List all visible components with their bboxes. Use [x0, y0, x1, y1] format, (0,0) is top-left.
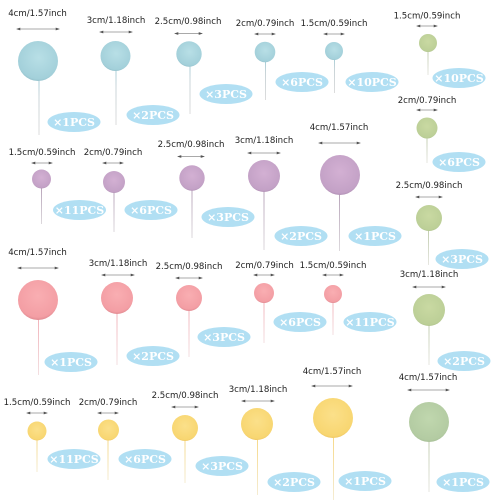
size arrow	[176, 277, 202, 279]
size label: 2.5cm/0.98inch	[155, 17, 221, 27]
quantity pill: ×1PCS	[344, 475, 386, 488]
topper: yellow 2.5cm	[152, 391, 248, 483]
ball	[320, 155, 360, 195]
topper: purple 3cm	[235, 136, 328, 250]
quantity pill: ×6PCS	[279, 316, 321, 329]
ball	[413, 294, 445, 326]
quantity pill: ×6PCS	[124, 453, 166, 466]
size label: 1.5cm/0.59inch	[300, 261, 366, 271]
quantity pill: ×3PCS	[441, 253, 483, 266]
size label: 1.5cm/0.59inch	[9, 148, 75, 158]
size label: 3cm/1.18inch	[400, 270, 458, 280]
topper: purple 4cm	[310, 123, 402, 251]
quantity pill: ×1PCS	[354, 230, 396, 243]
size label: 2.5cm/0.98inch	[158, 140, 224, 150]
size arrow	[319, 142, 360, 144]
quantity pill: ×10PCS	[347, 76, 397, 89]
size arrow	[102, 274, 134, 276]
size arrow	[255, 33, 275, 35]
size label: 2cm/0.79inch	[79, 398, 137, 408]
size arrow	[413, 286, 445, 288]
ball	[248, 160, 280, 192]
ball	[100, 41, 130, 71]
stick	[264, 302, 265, 343]
quantity pill: ×2PCS	[132, 109, 174, 122]
quantity pill: ×3PCS	[203, 331, 245, 344]
ball	[176, 285, 202, 311]
stick	[108, 440, 109, 480]
topper: yellow 3cm	[229, 385, 320, 495]
topper: green 3cm	[400, 270, 490, 371]
size arrow	[248, 152, 280, 154]
size label: 1.5cm/0.59inch	[301, 19, 367, 29]
size arrow	[324, 33, 344, 35]
stick	[334, 59, 335, 93]
ball	[325, 42, 343, 60]
topper: pink 3cm	[89, 259, 180, 366]
quantity pill: ×6PCS	[438, 156, 480, 169]
stick	[36, 440, 38, 472]
quantity pill: ×6PCS	[281, 76, 323, 89]
ball	[103, 171, 125, 193]
size arrow	[323, 274, 343, 276]
ball	[419, 34, 437, 52]
quantity pill: ×3PCS	[207, 211, 249, 224]
size arrow	[103, 162, 123, 164]
size label: 4cm/1.57inch	[399, 373, 457, 383]
stick	[41, 188, 42, 224]
topper: blue 1.5cm	[301, 19, 398, 93]
stick	[184, 440, 186, 483]
topper: blue 4cm	[8, 9, 100, 135]
stick	[192, 190, 193, 238]
size label: 2.5cm/0.98inch	[152, 391, 218, 401]
size arrow	[27, 412, 47, 414]
topper: blue 2cm	[236, 19, 328, 100]
size label: 4cm/1.57inch	[303, 367, 361, 377]
stick	[116, 70, 117, 125]
quantity pill: ×3PCS	[201, 460, 243, 473]
size label: 4cm/1.57inch	[8, 248, 67, 258]
topper: pink 2.5cm	[156, 262, 250, 357]
quantity pill: ×3PCS	[205, 88, 247, 101]
topper: green 1.5cm	[394, 12, 486, 88]
quantity pill: ×11PCS	[55, 204, 104, 217]
stick	[428, 441, 430, 492]
ball	[18, 280, 58, 320]
ball	[324, 285, 342, 303]
topper: yellow 4cm	[303, 367, 392, 500]
quantity pill: ×1PCS	[53, 116, 95, 129]
quantity pill: ×2PCS	[273, 476, 315, 489]
stick	[333, 437, 334, 500]
size arrow	[18, 267, 58, 269]
size arrow	[178, 156, 204, 158]
size arrow	[408, 389, 449, 391]
size arrow	[416, 196, 442, 198]
size arrow	[417, 109, 437, 111]
quantity pill: ×2PCS	[280, 230, 322, 243]
size label: 3cm/1.18inch	[89, 259, 147, 269]
stick	[190, 66, 191, 114]
topper: green 4cm	[399, 373, 490, 492]
ball	[28, 422, 46, 440]
topper: blue 3cm	[87, 16, 180, 125]
topper: purple 2.5cm	[158, 140, 254, 238]
quantity pill: ×10PCS	[434, 72, 484, 85]
quantity pill: ×6PCS	[130, 204, 172, 217]
stick	[428, 51, 429, 75]
stick	[264, 191, 265, 250]
ball	[98, 420, 119, 440]
stick	[116, 313, 118, 365]
size label: 2cm/0.79inch	[235, 261, 294, 271]
ball	[409, 402, 449, 442]
stick	[38, 80, 40, 135]
topper: green 2.5cm	[396, 181, 488, 269]
quantity pill: ×2PCS	[132, 350, 174, 363]
size arrow	[242, 400, 274, 402]
size arrow	[312, 385, 352, 387]
ball	[101, 282, 133, 314]
stick	[339, 194, 340, 251]
ball	[241, 408, 273, 440]
size label: 3cm/1.18inch	[87, 16, 145, 26]
size arrow	[98, 412, 118, 414]
topper: purple 1.5cm	[9, 148, 106, 224]
topper: purple 2cm	[84, 148, 178, 232]
stick	[257, 439, 258, 495]
topper: pink 4cm	[8, 248, 98, 375]
quantity pill: ×2PCS	[443, 355, 485, 368]
topper: yellow 2cm	[79, 398, 172, 480]
size label: 2cm/0.79inch	[398, 96, 456, 106]
size label: 1.5cm/0.59inch	[4, 398, 70, 408]
size label: 2.5cm/0.98inch	[156, 262, 222, 272]
size label: 4cm/1.57inch	[8, 9, 67, 19]
stick	[428, 230, 429, 265]
topper: green 2cm	[398, 96, 486, 172]
ball	[32, 170, 51, 188]
stick	[188, 310, 190, 357]
quantity pill: ×1PCS	[50, 356, 92, 369]
size label: 3cm/1.18inch	[229, 385, 287, 395]
stick	[426, 137, 428, 163]
stick	[265, 61, 266, 100]
quantity pill: ×11PCS	[345, 316, 395, 329]
topper: blue 2.5cm	[155, 17, 252, 114]
size arrow	[17, 28, 59, 30]
stick	[114, 192, 115, 232]
size label: 2cm/0.79inch	[84, 148, 142, 158]
size arrow	[172, 406, 198, 408]
topper: pink 1.5cm	[300, 261, 396, 335]
ball	[255, 42, 275, 62]
ball	[254, 283, 274, 303]
size arrow	[32, 162, 52, 164]
size arrow	[175, 32, 202, 34]
quantity pill: ×11PCS	[49, 453, 99, 466]
topper: pink 2cm	[235, 261, 326, 343]
size label: 3cm/1.18inch	[235, 136, 293, 146]
ball	[179, 165, 205, 191]
size label: 4cm/1.57inch	[310, 123, 368, 133]
ball	[176, 41, 202, 67]
ball	[416, 118, 438, 138]
stick	[428, 325, 430, 365]
size arrow	[100, 31, 132, 33]
size label: 2.5cm/0.98inch	[396, 181, 462, 191]
size arrow	[417, 25, 437, 27]
size arrow	[254, 274, 274, 276]
stick	[38, 319, 39, 375]
topper: yellow 1.5cm	[4, 398, 100, 472]
ball	[416, 205, 442, 231]
stick	[332, 302, 334, 335]
ball	[18, 41, 58, 81]
ball	[313, 398, 353, 438]
ball	[172, 415, 198, 441]
size label: 2cm/0.79inch	[236, 19, 294, 29]
quantity pill: ×1PCS	[442, 476, 484, 489]
size label: 1.5cm/0.59inch	[394, 12, 460, 22]
